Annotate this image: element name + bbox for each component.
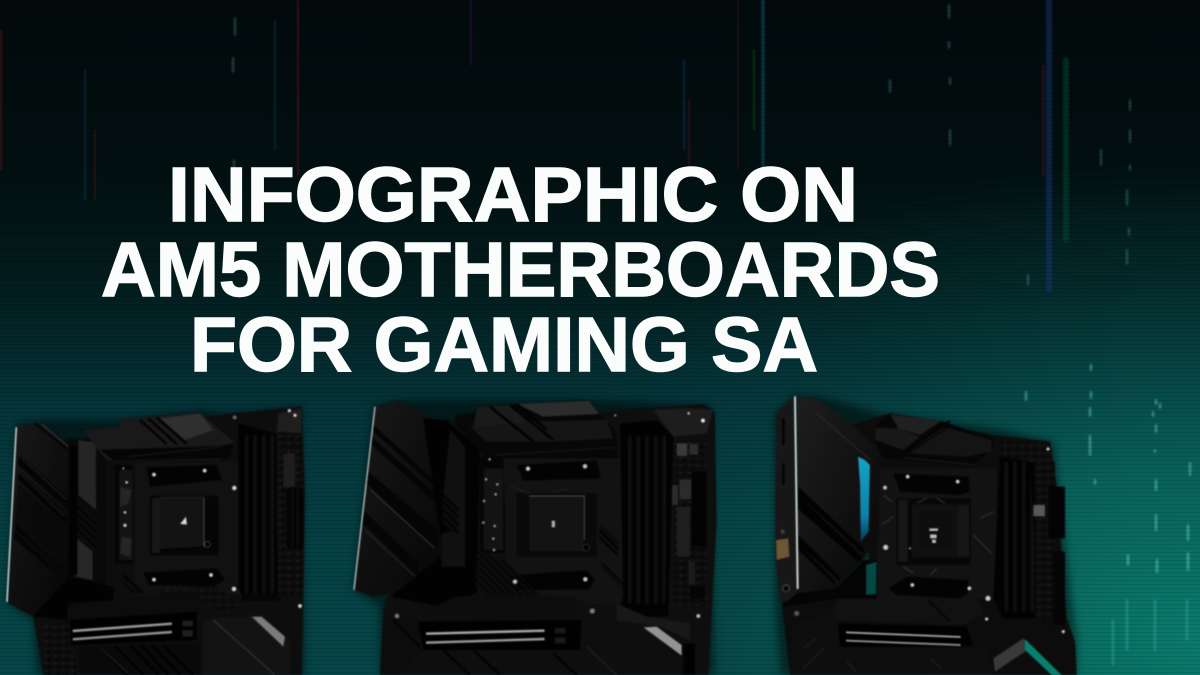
screws [395,412,705,618]
title: INFOGRAPHIC ON [168,152,858,238]
screws [794,447,1065,633]
screws [122,409,302,608]
right components [653,408,713,607]
top bracket [147,465,222,487]
top vrm heatsink [455,400,618,458]
bottom heatsinks [380,603,695,675]
pcie heatsink [828,598,985,647]
vrm components [480,457,505,553]
ram slots [617,420,673,617]
i/o side column [390,418,480,607]
bottom bracket [143,568,225,587]
title: FOR GAMING SA [190,302,818,388]
right components [277,408,303,597]
i/o heatsink [7,423,70,617]
cpu socket area [877,468,997,598]
i/o side column [33,438,113,620]
pcb [380,404,717,675]
top vrm heatsink [83,413,235,460]
pcie heatsink [68,594,200,645]
board shadow [7,407,305,675]
motherboard: left [7,407,305,675]
i/o shroud [775,396,879,607]
ram slots [993,448,1047,618]
cpu socket area [503,458,627,603]
motherboard: center [353,400,717,675]
ram slots [238,423,280,601]
diagonal traces [475,550,547,603]
bottom pcb and corner heatsink [792,612,1077,675]
pcb [33,407,305,675]
pcie heatsink [418,595,582,650]
top vrm heatsink [875,413,993,467]
title: AM5 MOTHERBOARDS [101,227,940,313]
title [101,152,940,388]
vrm components [115,465,133,563]
board shadow [775,395,1077,675]
right components [1000,440,1065,625]
cpu socket area [135,462,242,595]
bottom heatsinks [43,617,290,675]
icon: cyan light bar [858,457,870,542]
i/o heatsink [354,401,445,597]
pcb [782,413,1077,675]
motherboard: right [775,395,1077,675]
board shadow [353,400,715,675]
